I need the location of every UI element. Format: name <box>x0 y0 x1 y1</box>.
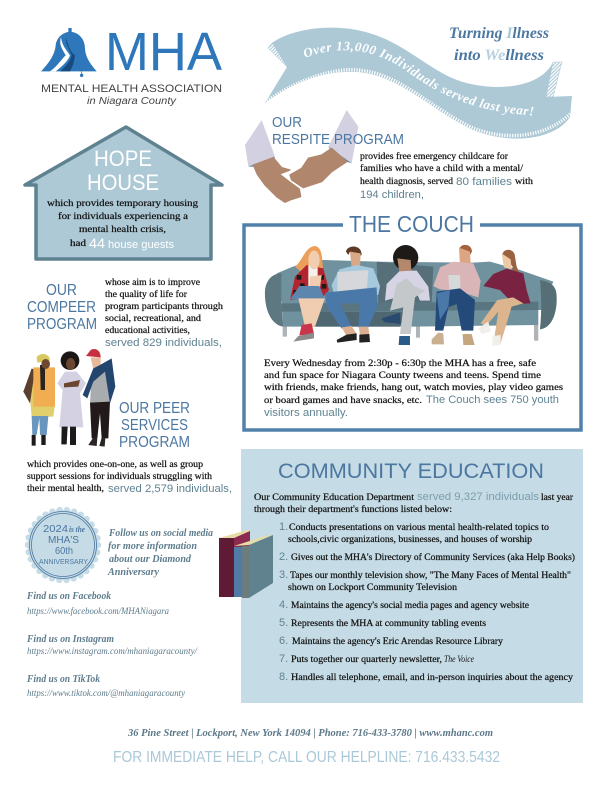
tagline <box>449 25 549 64</box>
description: educational activities, <box>105 326 190 336</box>
ribbon curve for text <box>305 50 545 116</box>
description: support sessions for individuals struggling with <box>27 471 212 482</box>
badge scallops <box>28 510 98 580</box>
social follow note <box>107 528 213 578</box>
heading: PROGRAM <box>27 316 97 333</box>
ribbon left fold <box>268 43 292 67</box>
tagline: Turning Illness <box>449 25 549 42</box>
list item 7: 7. <box>279 653 288 665</box>
list item 3: Tapes our monthly television show, "The Many Faces of Mental Health" <box>290 570 571 581</box>
ribbon body <box>265 28 572 139</box>
badge: 60th anniversary <box>28 510 98 580</box>
intro: Our Community Education Department <box>254 493 414 503</box>
description <box>105 278 223 336</box>
list item 4: Maintains the agency's social media pages and agency website <box>291 601 529 611</box>
description: or board games and have snacks, etc. <box>264 396 422 406</box>
ribbon banner <box>265 28 572 138</box>
stat: 750 youth visitors: The Couch sees 750 youth <box>426 394 559 406</box>
list item 6: 6. <box>279 635 288 647</box>
heading: OUR <box>46 282 77 299</box>
ribbon stitching <box>267 70 570 136</box>
friend 3 <box>83 349 115 447</box>
description: mental health crisis, <box>79 225 166 235</box>
Instagram: https://www.instagram.com/mhaniagaracounty/ <box>27 647 198 657</box>
blue book <box>234 535 273 598</box>
Facebook: Find us on Facebook <box>26 591 112 602</box>
Instagram: Find us on Instagram <box>26 634 114 645</box>
person 2 <box>325 246 380 343</box>
logo name: MENTAL HEALTH ASSOCIATION <box>41 83 222 95</box>
list item 7: Puts together our quarterly newsletter, <box>291 655 442 665</box>
stat: 2,579 individuals: served 2,579 individuals, <box>108 483 232 495</box>
friend 2 <box>57 351 86 445</box>
stat: families and children: 80 families <box>456 176 513 188</box>
list item 8: Handles all telephone, email, and in-person inquiries about the agency <box>291 673 573 683</box>
list item 1: 1. <box>279 521 288 533</box>
social follow note: for more information <box>108 541 197 552</box>
logo county: in Niagara County <box>87 96 177 107</box>
couch <box>265 260 557 341</box>
description: program participants through <box>105 302 223 312</box>
tagline: into Wellness <box>454 47 544 64</box>
heading: COMMUNITY EDUCATION <box>278 460 544 483</box>
Facebook <box>26 591 169 617</box>
list item 2: 2. <box>279 551 288 563</box>
list item 6: Maintains the agency's Eric Arendas Resource Library <box>292 637 503 647</box>
description <box>264 358 563 406</box>
heading: THE COUCH <box>349 211 474 237</box>
badge text: 60th <box>55 546 73 557</box>
social follow note: Anniversary <box>107 567 159 578</box>
list item 1: schools,civic organizations, businesses, and houses of worship <box>288 534 532 545</box>
badge text: MHA'S <box>48 534 79 546</box>
footer helpline: FOR IMMEDIATE HELP, CALL OUR HELPLINE: 716.433.5432 <box>113 749 500 766</box>
description: social, recreational, and <box>105 314 201 324</box>
person 3 <box>382 245 430 345</box>
badge text: is the <box>69 525 85 534</box>
description: families who have a child with a mental/ <box>360 163 523 174</box>
panel: Peer Services Program <box>27 400 232 495</box>
list item 1 <box>279 521 549 545</box>
TikTok: Find us on TikTok <box>26 674 101 685</box>
Instagram <box>26 634 198 657</box>
person 1 <box>290 246 329 342</box>
list item 3: shown on Lockport Community Television <box>288 583 457 593</box>
heading <box>27 282 97 333</box>
ribbon right fold <box>546 62 562 97</box>
icon: books <box>219 530 273 598</box>
friend 1 <box>23 354 55 446</box>
heading <box>272 115 404 148</box>
heading: RESPITE PROGRAM <box>272 132 404 148</box>
list item 7 <box>279 653 474 665</box>
social follow note: about our Diamond <box>109 554 192 565</box>
description: provides free emergency childcare for <box>360 151 509 162</box>
list item 1: Conducts presentations on various mental health-related topics to <box>289 523 549 533</box>
heading: SERVICES <box>121 417 188 434</box>
description: had <box>70 239 86 249</box>
description <box>47 199 198 249</box>
description: the quality of life for <box>105 289 188 300</box>
stat: 750 youth visitors <box>264 394 559 419</box>
description <box>360 151 533 187</box>
heading <box>119 400 190 451</box>
list item 3 <box>279 569 571 593</box>
list item 7: The Voice <box>444 654 474 664</box>
description: and fun space for Niagara County tweens and teens. Spend time <box>264 370 541 381</box>
panel: The Couch <box>244 211 581 430</box>
ribbon text: Over 13,000 Individuals served last year! <box>304 42 534 116</box>
heading: OUR PEER <box>119 400 190 417</box>
Facebook: https://www.facebook.com/MHANiagara <box>27 606 169 617</box>
icon: reaching hands <box>245 110 358 202</box>
list item 2: Gives out the MHA's Directory of Community Services (aka Help Books) <box>291 552 575 563</box>
stat: 44 house guests: house guests <box>108 239 175 251</box>
TikTok <box>26 674 186 699</box>
description: Every Wednesday from 2:30p - 6:30p the MHA has a free, safe <box>264 358 536 369</box>
intro <box>254 491 574 515</box>
icon: bell with faces <box>41 28 97 77</box>
list item 5: 5. <box>279 617 288 629</box>
description <box>27 460 212 494</box>
description: with <box>515 177 533 187</box>
intro: through their department's functions listed below: <box>254 504 452 515</box>
description: health diagnosis, served <box>360 177 453 187</box>
description: which provides one-on-one, as well as group <box>27 460 203 470</box>
intro: served 9,327 individuals <box>417 491 540 503</box>
panel background <box>241 449 583 703</box>
description: which provides temporary housing <box>47 199 198 209</box>
person 4 <box>432 245 481 345</box>
stat: 44 house guests: 44 <box>89 236 106 251</box>
heading: Hope: HOPE <box>94 146 152 171</box>
badge text: 2024 <box>43 524 68 535</box>
stat: 829 individuals: served 829 individuals, <box>105 337 222 349</box>
panel: Compeer Program <box>27 278 223 349</box>
heading: COMPEER <box>27 299 96 316</box>
heading: House: HOUSE <box>87 170 159 195</box>
social follow note: Follow us on social media <box>108 528 213 539</box>
stat: 44 house guests <box>89 236 175 251</box>
description: their mental health, <box>27 484 104 494</box>
list item 3: 3. <box>279 569 288 581</box>
description: whose aim is to improve <box>105 278 200 288</box>
list item 5: Represents the MHA at community tabling events <box>291 619 486 629</box>
frame <box>244 225 581 430</box>
list item 4: 4. <box>279 599 288 611</box>
footer address: 36 Pine Street | Lockport, New York 14094 | Phone: 716-433-3780 | www.mhanc.com <box>127 728 493 739</box>
house shape <box>25 127 222 259</box>
illustration: three friends <box>23 349 115 447</box>
description: with friends, make friends, hang out, watch movies, play video games <box>264 382 563 393</box>
stat: families and children <box>360 176 513 201</box>
stat: families and children: 194 children, <box>360 189 424 201</box>
illustration: teens on couch <box>265 245 557 346</box>
list item 8: 8. <box>279 671 288 683</box>
logo letters MHA: MHA <box>105 22 222 82</box>
social links <box>26 591 198 699</box>
description: for individuals experiencing a <box>58 211 189 222</box>
badge text <box>39 524 88 566</box>
panel: Hope House <box>25 127 222 259</box>
maroon book <box>219 530 250 597</box>
panel: Community Education <box>241 449 583 703</box>
stat: 750 youth visitors: visitors annually. <box>264 407 348 419</box>
person 5 <box>478 250 531 346</box>
logo: Mental Health Association <box>41 22 222 107</box>
panel: Respite Program <box>272 115 533 201</box>
heading: PROGRAM <box>119 434 190 451</box>
intro: last year <box>541 493 574 503</box>
heading: OUR <box>272 115 302 131</box>
TikTok: https://www.tiktok.com/@mhaniagaracounty <box>27 689 186 699</box>
badge text: ANNIVERSARY <box>39 559 88 566</box>
badge rings <box>30 512 96 578</box>
